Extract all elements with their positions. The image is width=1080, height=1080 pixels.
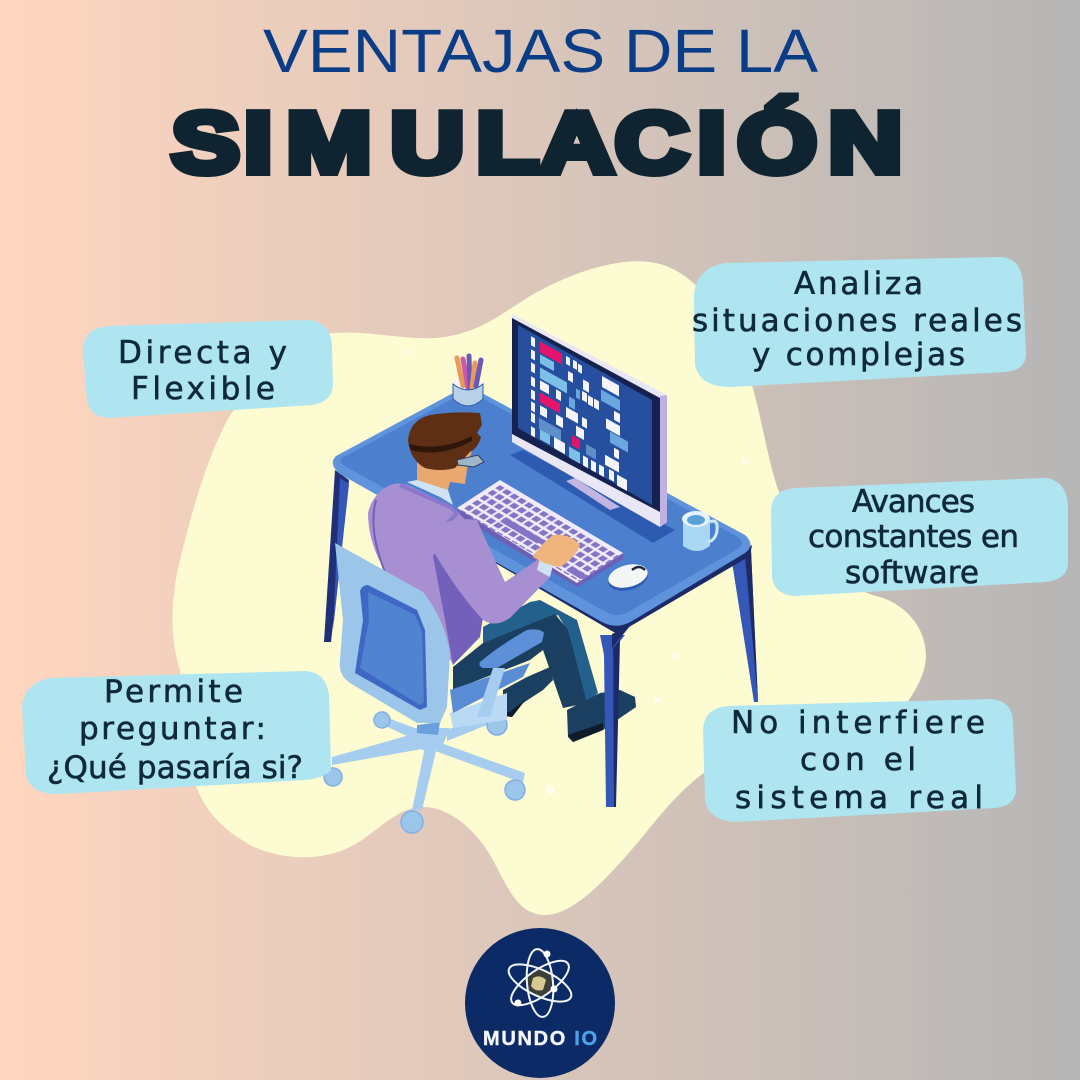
callout: directa y flexible [83, 320, 333, 418]
chair seat support [450, 693, 507, 728]
callout: directa y flexible: Flexible [131, 371, 275, 407]
desk right leg [732, 550, 758, 702]
blob backdrop [172, 261, 926, 915]
callout: avances software: constantes en [808, 519, 1019, 555]
jacket seam [400, 485, 457, 530]
logo: mundo io [465, 928, 615, 1078]
cuff [537, 558, 553, 577]
arm [427, 519, 550, 624]
desk top [333, 389, 750, 626]
callout: no interfiere: con el [800, 742, 916, 778]
callout: avances software [771, 478, 1068, 596]
chair column [417, 722, 440, 735]
armrest [479, 629, 544, 668]
screen blocks [531, 336, 628, 492]
callout: permite preguntar: ¿Qué pasaría si? [47, 750, 303, 786]
logo text: MUNDO IO [483, 1028, 597, 1050]
pen cup [453, 356, 483, 406]
callout: permite preguntar [22, 671, 331, 794]
callout: permite preguntar: Permite [104, 674, 243, 710]
callout: permite preguntar: preguntar: [79, 711, 266, 747]
hand [533, 535, 580, 567]
keyboard [457, 480, 623, 587]
person jacket [368, 484, 580, 665]
desk back leg [324, 470, 349, 642]
callout: analiza situaciones: situaciones reales [692, 303, 1022, 339]
inner arm shading [433, 547, 483, 665]
desk underside [336, 462, 752, 634]
illustration: person at computer desk [324, 314, 758, 833]
callout: no interfiere: sistema real [735, 780, 983, 816]
jacket back line [373, 500, 385, 572]
callout: no interfiere [703, 699, 1016, 822]
title line one: VENTAJAS DE LA [263, 17, 818, 85]
arm support [477, 668, 505, 717]
chair backrest [335, 543, 450, 723]
callout: no interfiere: No interfiere [731, 705, 985, 741]
icon: atom and globe [504, 948, 576, 1018]
chair base [332, 714, 525, 810]
left shoe [503, 667, 553, 717]
monitor stand [566, 478, 620, 510]
coffee mug [682, 511, 717, 551]
callout: directa y flexible: Directa y [118, 335, 287, 371]
callout: analiza situaciones [692, 257, 1026, 387]
title [172, 17, 902, 190]
glasses [457, 455, 484, 467]
monitor screen [518, 325, 652, 505]
right shoe [567, 690, 636, 742]
chair seat [450, 663, 530, 713]
monitor [512, 314, 667, 527]
chair casters [324, 712, 525, 833]
person trousers [453, 600, 636, 742]
speck decorations [406, 350, 748, 794]
callout: avances software: software [845, 555, 979, 591]
mouse [606, 560, 650, 595]
monitor shadow [510, 450, 675, 543]
person head [407, 412, 484, 505]
callout: avances software: Avances [852, 484, 975, 520]
callout: analiza situaciones: y complejas [752, 337, 965, 373]
callout: analiza situaciones: Analiza [794, 266, 923, 302]
desk front leg [600, 626, 630, 807]
office chair [324, 543, 544, 833]
title line two: SIMULACIÓN [172, 95, 902, 190]
